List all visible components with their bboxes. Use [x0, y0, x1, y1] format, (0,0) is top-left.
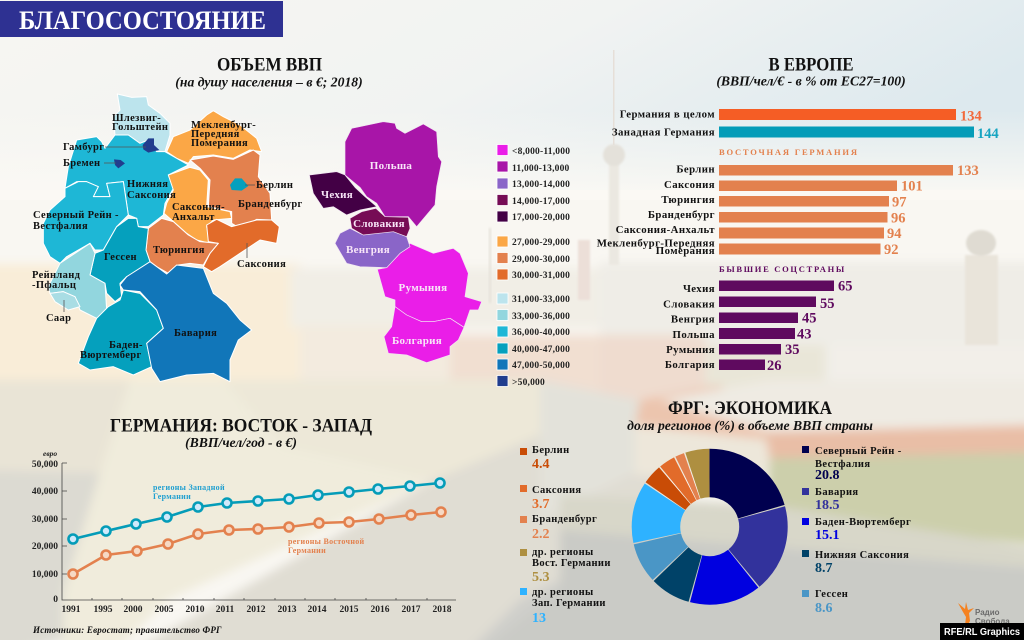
donut legend: left: Саксония	[532, 485, 582, 496]
line chart: GDP per capita: 30,000	[32, 515, 58, 525]
map: Eastern Europe: Словакия	[353, 218, 405, 230]
bar chart: Germany vs EU27	[597, 108, 999, 374]
line chart: GDP per capita: 50,000	[32, 460, 58, 470]
bar chart: Germany vs EU27: 65	[838, 279, 852, 295]
map legend: 27,000-29,000	[512, 238, 570, 248]
bar chart: Germany vs EU27: 43	[797, 327, 812, 343]
heading: FRG economy: доля регионов (%) в объеме ВВП страны	[627, 418, 873, 434]
logo: Radio Svoboda	[958, 602, 1010, 626]
map legend: 30,000-31,000	[512, 271, 570, 281]
map: Germany: Гамбург	[63, 142, 104, 153]
bar chart: Germany vs EU27: Польша	[673, 329, 715, 341]
line chart: GDP per capita: 10,000	[32, 570, 58, 580]
map: Germany: Северный Рейн -	[33, 210, 119, 221]
donut legend: right: 15.1	[815, 528, 840, 543]
line chart: GDP per capita: регионы Восточной	[288, 537, 365, 546]
donut legend: left: Зап. Германии	[532, 598, 606, 609]
map: Eastern Europe	[309, 122, 482, 363]
credit bar: RFE/RL Graphics	[944, 627, 1020, 638]
line chart: GDP per capita: 2015	[340, 605, 359, 615]
map: Germany: Берлин	[256, 180, 293, 191]
line chart: GDP per capita: 1995	[94, 605, 113, 615]
bar chart: Germany vs EU27: 35	[785, 342, 800, 358]
map: Germany: -Пфальц	[32, 280, 76, 291]
bar chart: Germany vs EU27: Румыния	[666, 344, 715, 356]
bar chart: Germany vs EU27: 96	[891, 211, 906, 227]
bar chart: Germany vs EU27: Померания	[656, 245, 715, 257]
donut legend: left	[520, 445, 611, 626]
dome and towers	[965, 255, 998, 345]
bar chart: Germany vs EU27: 45	[802, 311, 816, 327]
logo: Radio Svoboda: Радио	[975, 608, 1000, 617]
donut legend: left: др. регионы	[532, 587, 594, 598]
main banner: БЛАГОСОСТОЯНИЕ	[19, 6, 266, 35]
bar chart: Germany vs EU27: Чехия	[683, 283, 715, 295]
map: Germany: Бавария	[174, 328, 217, 339]
bar chart: Germany vs EU27: Словакия	[663, 299, 715, 311]
bar chart: Germany vs EU27: 134	[960, 108, 982, 124]
bar chart: Germany vs EU27: 94	[887, 226, 902, 242]
line chart: GDP per capita: 0	[53, 595, 58, 605]
donut legend: left: др. регионы	[532, 547, 594, 558]
heading: in Europe	[716, 54, 906, 90]
donut legend: right: 8.6	[815, 601, 832, 616]
line chart: GDP per capita: 2013	[278, 605, 297, 615]
bar chart: Germany vs EU27: 133	[957, 163, 979, 179]
line chart: GDP per capita: 2014	[308, 605, 327, 615]
heading: in Europe: В ЕВРОПЕ	[768, 54, 854, 76]
map: Germany: Вестфалия	[33, 221, 88, 232]
donut legend: right: 20.8	[815, 468, 840, 483]
donut legend: left: Берлин	[532, 445, 570, 456]
map legend: 31,000-33,000	[512, 295, 570, 305]
donut legend: right: Нижняя Саксония	[815, 550, 909, 561]
donut legend: right	[802, 446, 911, 616]
line chart: GDP per capita: 2012	[246, 605, 266, 615]
bar chart: Germany vs EU27: Саксония	[664, 179, 715, 191]
map: Eastern Europe: Болгария	[392, 335, 442, 347]
line chart: GDP per capita: 2010	[186, 605, 205, 615]
map legend: 17,000-20,000	[512, 213, 570, 223]
map: Germany: Бремен	[63, 158, 100, 169]
map: Eastern Europe: Польша	[370, 160, 412, 172]
donut legend: right: Гессен	[815, 589, 848, 600]
bar chart: Germany vs EU27: Бранденбург	[648, 209, 715, 221]
map: Germany: Баден-	[109, 340, 143, 351]
heading: East-West Germany	[110, 416, 372, 451]
bar chart: Germany vs EU27: 97	[892, 195, 906, 211]
map legend: 14,000-17,000	[512, 197, 570, 207]
map legend	[497, 144, 570, 388]
donut legend: right: Бавария	[815, 487, 858, 498]
map legend: 47,000-50,000	[512, 361, 570, 371]
map: Germany: Бранденбург	[238, 199, 303, 210]
map: Germany: Шлезвиг-	[112, 113, 161, 124]
line chart: GDP per capita: Германии	[153, 492, 191, 501]
map: Eastern Europe: Румыния	[399, 282, 447, 294]
line chart: GDP per capita: 2000	[124, 605, 143, 615]
bar chart: Germany vs EU27: 55	[820, 296, 834, 312]
line chart: GDP per capita: 40,000	[32, 487, 58, 497]
heading: East-West Germany: (ВВП/чел/год - в €)	[185, 435, 297, 451]
map: Germany: Гессен	[104, 252, 137, 263]
map legend: 40,000-47,000	[512, 345, 570, 355]
map: Germany: Мекленбург-	[191, 120, 256, 131]
series: East Germany	[68, 508, 446, 578]
heading: GDP volume: (на душу населения – в €; 2018)	[175, 74, 363, 90]
line chart: GDP per capita	[32, 449, 456, 615]
bar chart: Germany vs EU27: Венгрия	[671, 314, 715, 326]
donut legend: right: Баден-Вюртемберг	[815, 517, 911, 528]
map: Eastern Europe: Чехия	[321, 189, 353, 201]
heading: East-West Germany: ГЕРМАНИЯ: ВОСТОК - ЗАПАД	[110, 416, 372, 436]
logo: Radio Svoboda: Свобода	[975, 617, 1010, 626]
bar chart: Germany vs EU27: Берлин	[676, 164, 715, 176]
map: Germany: Рейнланд	[32, 270, 81, 281]
map: Eastern Europe: Венгрия	[346, 244, 390, 256]
donut legend: left: 13	[532, 611, 546, 626]
bar chart: Germany vs EU27: Саксония-Анхальт	[616, 224, 715, 236]
bar chart: Germany vs EU27: 92	[884, 242, 898, 258]
bar chart: Germany vs EU27: Занадная Германия	[612, 126, 715, 138]
map: Germany: Вюртемберг	[80, 350, 142, 361]
heading: GDP volume	[175, 54, 363, 90]
donut legend: left: Вост. Германии	[532, 558, 611, 569]
bar chart: Germany vs EU27: Болгария	[665, 359, 715, 371]
map legend: 33,000-36,000	[512, 312, 570, 322]
bar chart: Germany vs EU27: 26	[767, 358, 782, 374]
map: Germany: Саксония	[127, 190, 176, 201]
heading: GDP volume: ОБЪЕМ ВВП	[217, 54, 322, 76]
map: Germany: Саксония	[237, 259, 286, 270]
series: West Germany	[68, 478, 444, 544]
map legend: 29,000-30,000	[512, 255, 570, 265]
bar chart: Germany vs EU27: Германия в целом	[620, 108, 715, 120]
map: Germany: Нижняя	[127, 179, 168, 190]
map: Germany: Передняя	[191, 129, 240, 140]
map: Germany	[32, 94, 303, 382]
map: Germany: Гольштейн	[112, 122, 168, 133]
donut legend: left: 3.7	[532, 497, 550, 512]
line chart: GDP per capita: регионы Западной	[153, 483, 225, 492]
line chart: GDP per capita: 2005	[154, 605, 174, 615]
map: Germany: Саар	[46, 313, 71, 324]
donut legend: left: Бранденбург	[532, 514, 597, 525]
donut legend: right: Вестфалия	[815, 459, 870, 470]
line chart: GDP per capita: 1991	[62, 605, 81, 615]
line chart: GDP per capita: 2011	[216, 605, 234, 615]
map legend: 11,000-13,000	[512, 164, 570, 174]
donut legend: right: Северный Рейн -	[815, 446, 902, 457]
credit bar	[940, 623, 1024, 640]
map legend: 36,000-40,000	[512, 328, 570, 338]
map: Germany: Анхальт	[172, 212, 215, 223]
line chart: GDP per capita: 2016	[370, 605, 390, 615]
donut chart: regional shares	[656, 473, 763, 580]
map legend: <8,000-11,000	[512, 147, 570, 157]
bar chart: Germany vs EU27: Мекленбург-Передняя	[597, 238, 715, 250]
line chart: GDP per capita: 2017	[402, 605, 421, 615]
donut legend: right: 8.7	[815, 561, 832, 576]
heading: FRG economy	[627, 398, 873, 434]
sources note: Источники: Евростат; правительство ФРГ	[32, 625, 222, 635]
donut legend: left: 2.2	[532, 527, 550, 542]
map legend: 13,000-14,000	[512, 180, 570, 190]
line chart: GDP per capita: Германии	[288, 546, 326, 555]
subheading: Eastern Germany: ВОСТОЧНАЯ ГЕРМАНИЯ	[719, 147, 859, 157]
bar chart: Germany vs EU27: Тюрингия	[661, 194, 715, 206]
heading: in Europe: (ВВП/чел/€ - в % от ЕС27=100)	[716, 74, 906, 90]
donut legend: left: 5.3	[532, 570, 550, 585]
heading: FRG economy: ФРГ: ЭКОНОМИКА	[668, 398, 832, 419]
map: Germany: Саксония-	[172, 202, 225, 213]
bar chart: Germany vs EU27: 101	[901, 179, 923, 195]
donut legend: right: 18.5	[815, 498, 840, 513]
line chart: GDP per capita: евро	[43, 449, 57, 458]
map: Germany: Тюрингия	[153, 245, 205, 256]
TV tower	[613, 50, 614, 145]
line chart: GDP per capita: 2018	[432, 605, 452, 615]
subheading: former socialist countries: БЫВШИЕ СОЦСТРАНЫ	[719, 264, 846, 274]
donut legend: left: 4.4	[532, 457, 550, 472]
map: Germany: Померания	[191, 138, 248, 149]
bar chart: Germany vs EU27: 144	[977, 126, 999, 142]
map legend: >50,000	[512, 378, 545, 388]
line chart: GDP per capita: 20,000	[32, 542, 58, 552]
